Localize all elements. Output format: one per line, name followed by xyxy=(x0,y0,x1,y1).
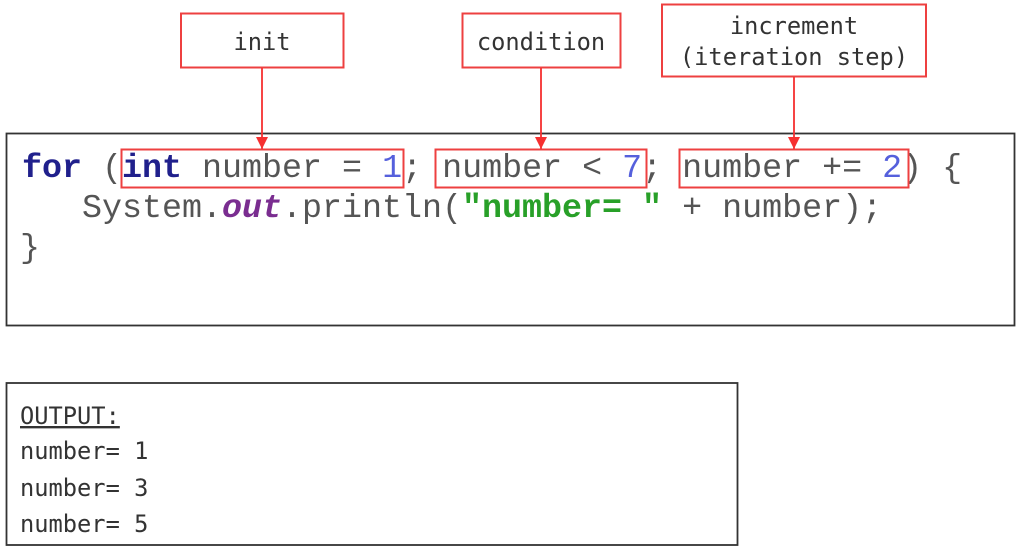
panel: code xyxy=(6,134,1014,326)
label: condition: condition xyxy=(477,28,605,56)
arrow: condition to code xyxy=(540,68,542,149)
highlight: increment expression xyxy=(680,150,908,188)
code: closing brace: } xyxy=(20,230,40,268)
output line 1: number= 1 xyxy=(20,437,148,465)
arrow: init to code xyxy=(261,68,263,149)
label: increment xyxy=(662,4,926,76)
arrow: increment to code xyxy=(793,77,795,149)
output heading: OUTPUT: xyxy=(20,402,120,430)
output line 2: number= 3 xyxy=(20,474,148,502)
code: println statement: System.out.println("number= " + number); xyxy=(82,190,882,228)
label: increment: increment xyxy=(730,12,858,40)
panel: output xyxy=(6,383,738,545)
label: condition xyxy=(462,14,620,68)
highlight: condition expression xyxy=(436,150,646,188)
highlight: init expression xyxy=(122,150,404,188)
label: init: init xyxy=(233,28,291,56)
output line 3: number= 5 xyxy=(20,510,148,538)
label: increment: (iteration step) xyxy=(680,43,908,71)
label: init xyxy=(181,14,344,68)
code: for loop header: for (int number = 1; number < 7; number += 2) { xyxy=(22,150,962,188)
